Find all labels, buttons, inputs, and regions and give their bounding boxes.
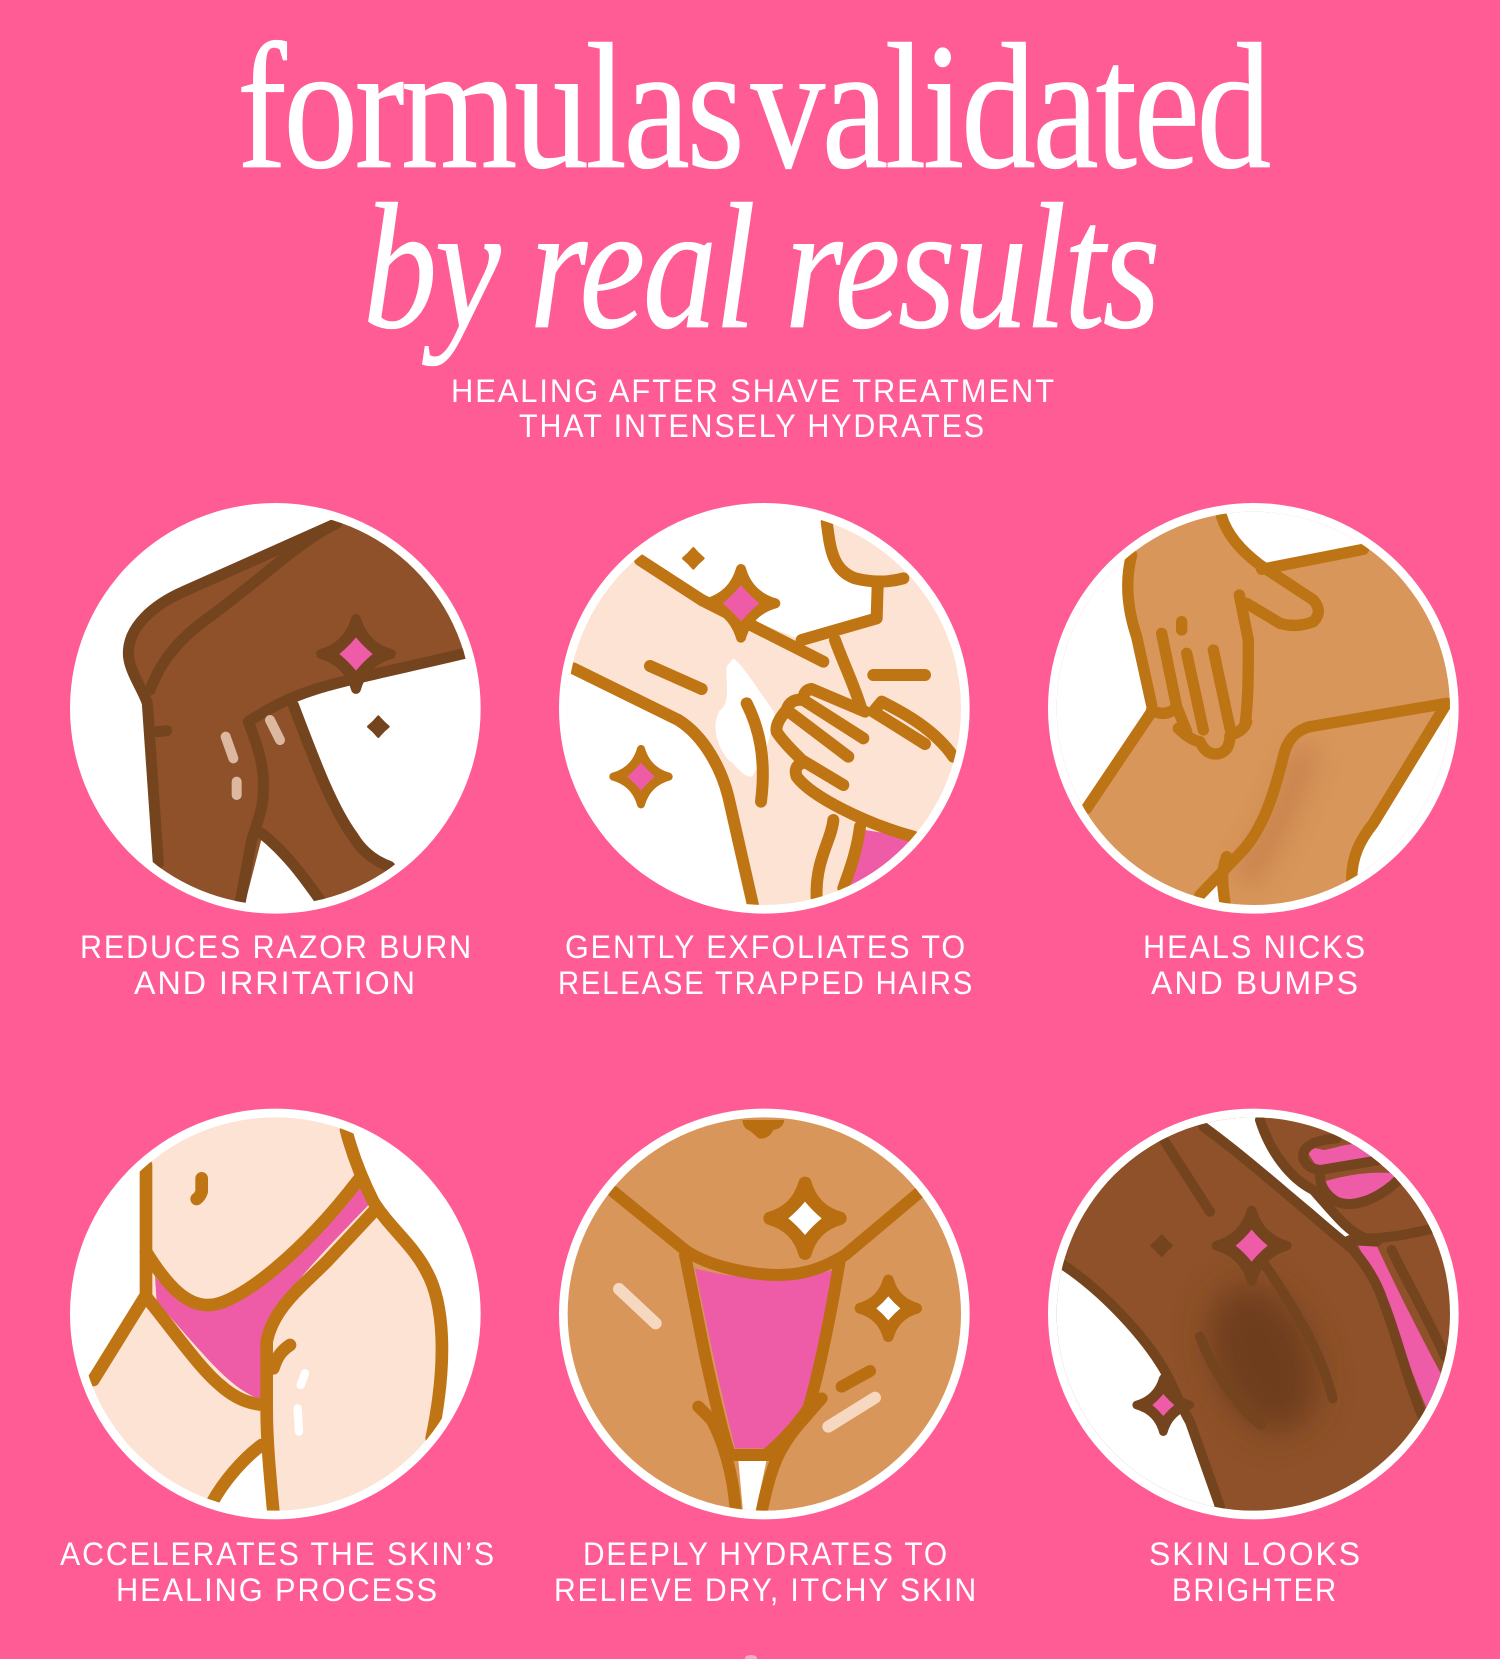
caption: RELIEVE DRY, ITCHY SKIN [554, 1572, 978, 1608]
panel: skin looks brighter [1048, 1108, 1459, 1602]
caption: HEALS NICKS [1143, 929, 1367, 965]
title [237, 7, 1270, 366]
panel: accelerates healing [60, 1108, 493, 1602]
caption [80, 929, 473, 1001]
subtitle: THAT INTENSELY HYDRATES [519, 408, 986, 444]
caption: HEALING PROCESS [116, 1572, 439, 1608]
icon: hand applying cream illustration [559, 503, 970, 914]
caption: BRIGHTER [1172, 1572, 1338, 1608]
icon: hand on leg illustration [1048, 503, 1459, 914]
icon: hip illustration [70, 1108, 481, 1520]
caption: ACCELERATES THE SKIN’S [60, 1536, 496, 1572]
caption: REDUCES RAZOR BURN [80, 929, 473, 965]
caption [554, 1536, 978, 1608]
caption: SKIN LOOKS [1149, 1536, 1362, 1572]
icon: underarm illustration [1048, 1108, 1459, 1520]
caption: AND BUMPS [1151, 965, 1360, 1001]
panel: gently exfoliates [559, 503, 971, 994]
title: by real results [363, 167, 1158, 366]
subtitle: HEALING AFTER SHAVE TREATMENT [451, 373, 1056, 409]
panel: heals nicks [1048, 503, 1459, 994]
caption [60, 1536, 496, 1608]
subtitle [451, 373, 1056, 444]
caption: RELEASE TRAPPED HAIRS [558, 965, 974, 1001]
caption [1143, 929, 1367, 1001]
title: formulas validated [237, 7, 1270, 206]
caption [1149, 1536, 1362, 1608]
caption: GENTLY EXFOLIATES TO [565, 929, 967, 965]
caption: AND IRRITATION [134, 965, 417, 1001]
icon: knee illustration [70, 503, 493, 923]
icon: bikini area illustration [559, 1108, 970, 1520]
panel: deeply hydrates [545, 1095, 985, 1608]
panel: reduces razor burn [70, 503, 493, 1001]
caption [558, 929, 974, 1001]
caption: DEEPLY HYDRATES TO [583, 1536, 949, 1572]
